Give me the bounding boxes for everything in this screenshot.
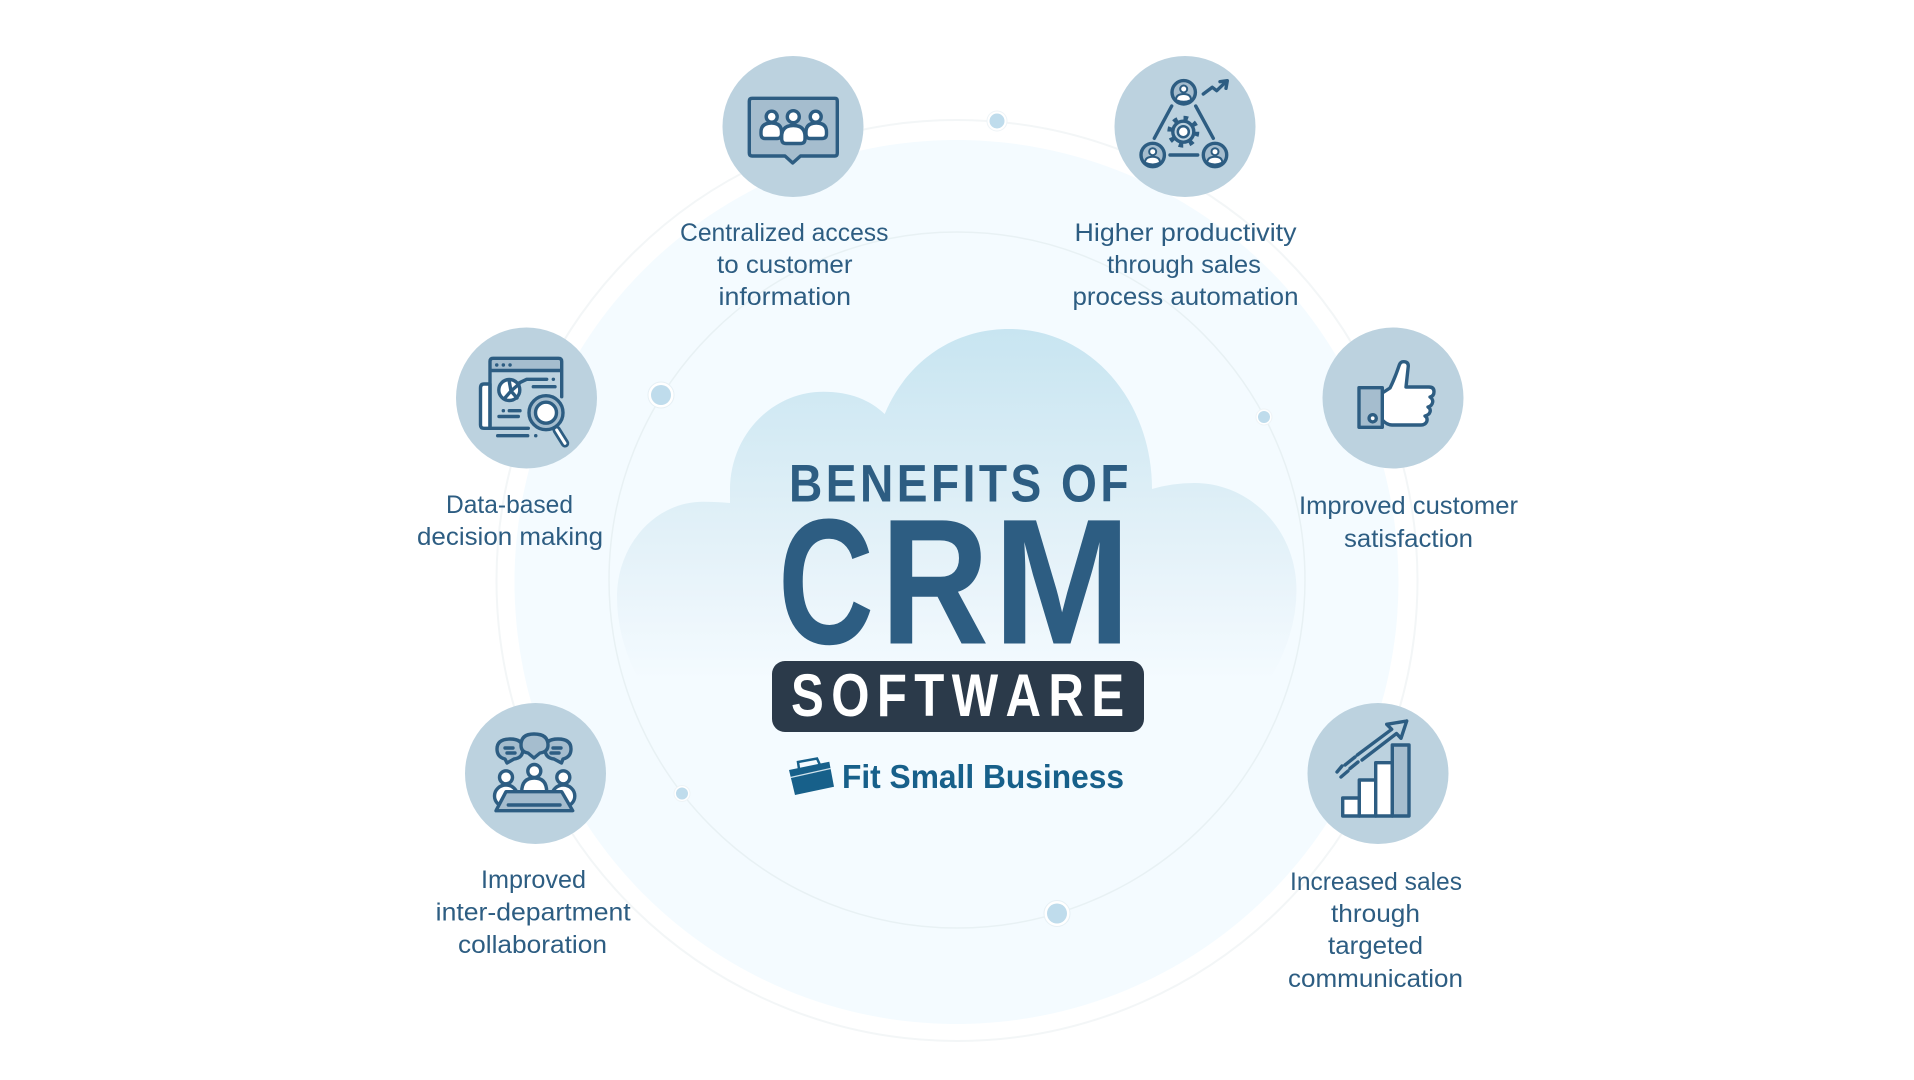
- icon: report with magnifier: [480, 358, 565, 443]
- benefit: inter-department collaboration: [436, 703, 631, 959]
- label: Centralized access: [680, 219, 888, 247]
- logo: Fit Small Business: Fit Small Business: [842, 759, 1124, 796]
- background circle: [514, 140, 1398, 1024]
- benefit: increased sales: [1288, 703, 1463, 993]
- label: Data-based: [446, 491, 573, 519]
- label: [436, 866, 631, 959]
- title: CRM: R: [880, 482, 989, 682]
- label: Higher productivity: [1074, 219, 1297, 247]
- icon: thumbs up: [1359, 362, 1434, 427]
- title: benefits of: BENEFITS OF: [789, 454, 1132, 513]
- label: [1072, 219, 1298, 311]
- icon: team process gear: [1141, 81, 1227, 167]
- icon: group in speech bubble: [749, 98, 837, 163]
- cloud: [617, 329, 1296, 682]
- title: CRM: M: [993, 482, 1131, 682]
- label: process automation: [1072, 283, 1298, 311]
- label: through sales: [1107, 251, 1261, 279]
- icon: meeting table: [494, 734, 575, 811]
- label: inter-department: [436, 898, 631, 926]
- label: [680, 219, 888, 311]
- label: [417, 491, 603, 551]
- orbit dots: [648, 111, 1272, 926]
- label: satisfaction: [1344, 525, 1473, 553]
- benefit: customer satisfaction: [1299, 328, 1518, 553]
- label: [1299, 492, 1518, 553]
- label: Increased sales: [1290, 868, 1462, 896]
- label: targeted: [1328, 932, 1423, 960]
- label: to customer: [717, 251, 852, 279]
- benefit: centralized access: [680, 56, 888, 311]
- label: collaboration: [458, 931, 607, 959]
- benefit: higher productivity: [1072, 56, 1298, 311]
- label: Improved: [481, 866, 586, 894]
- software badge: SOFTWARE: [791, 661, 1132, 729]
- title: CRM: C: [778, 482, 874, 682]
- label: [1288, 868, 1463, 993]
- icon: growth chart: [1337, 721, 1409, 816]
- label: through: [1331, 900, 1420, 928]
- label: communication: [1288, 965, 1463, 993]
- label: Improved customer: [1299, 492, 1518, 520]
- label: information: [718, 283, 851, 311]
- label: decision making: [417, 523, 603, 551]
- benefit: data-based decisions: [417, 328, 603, 551]
